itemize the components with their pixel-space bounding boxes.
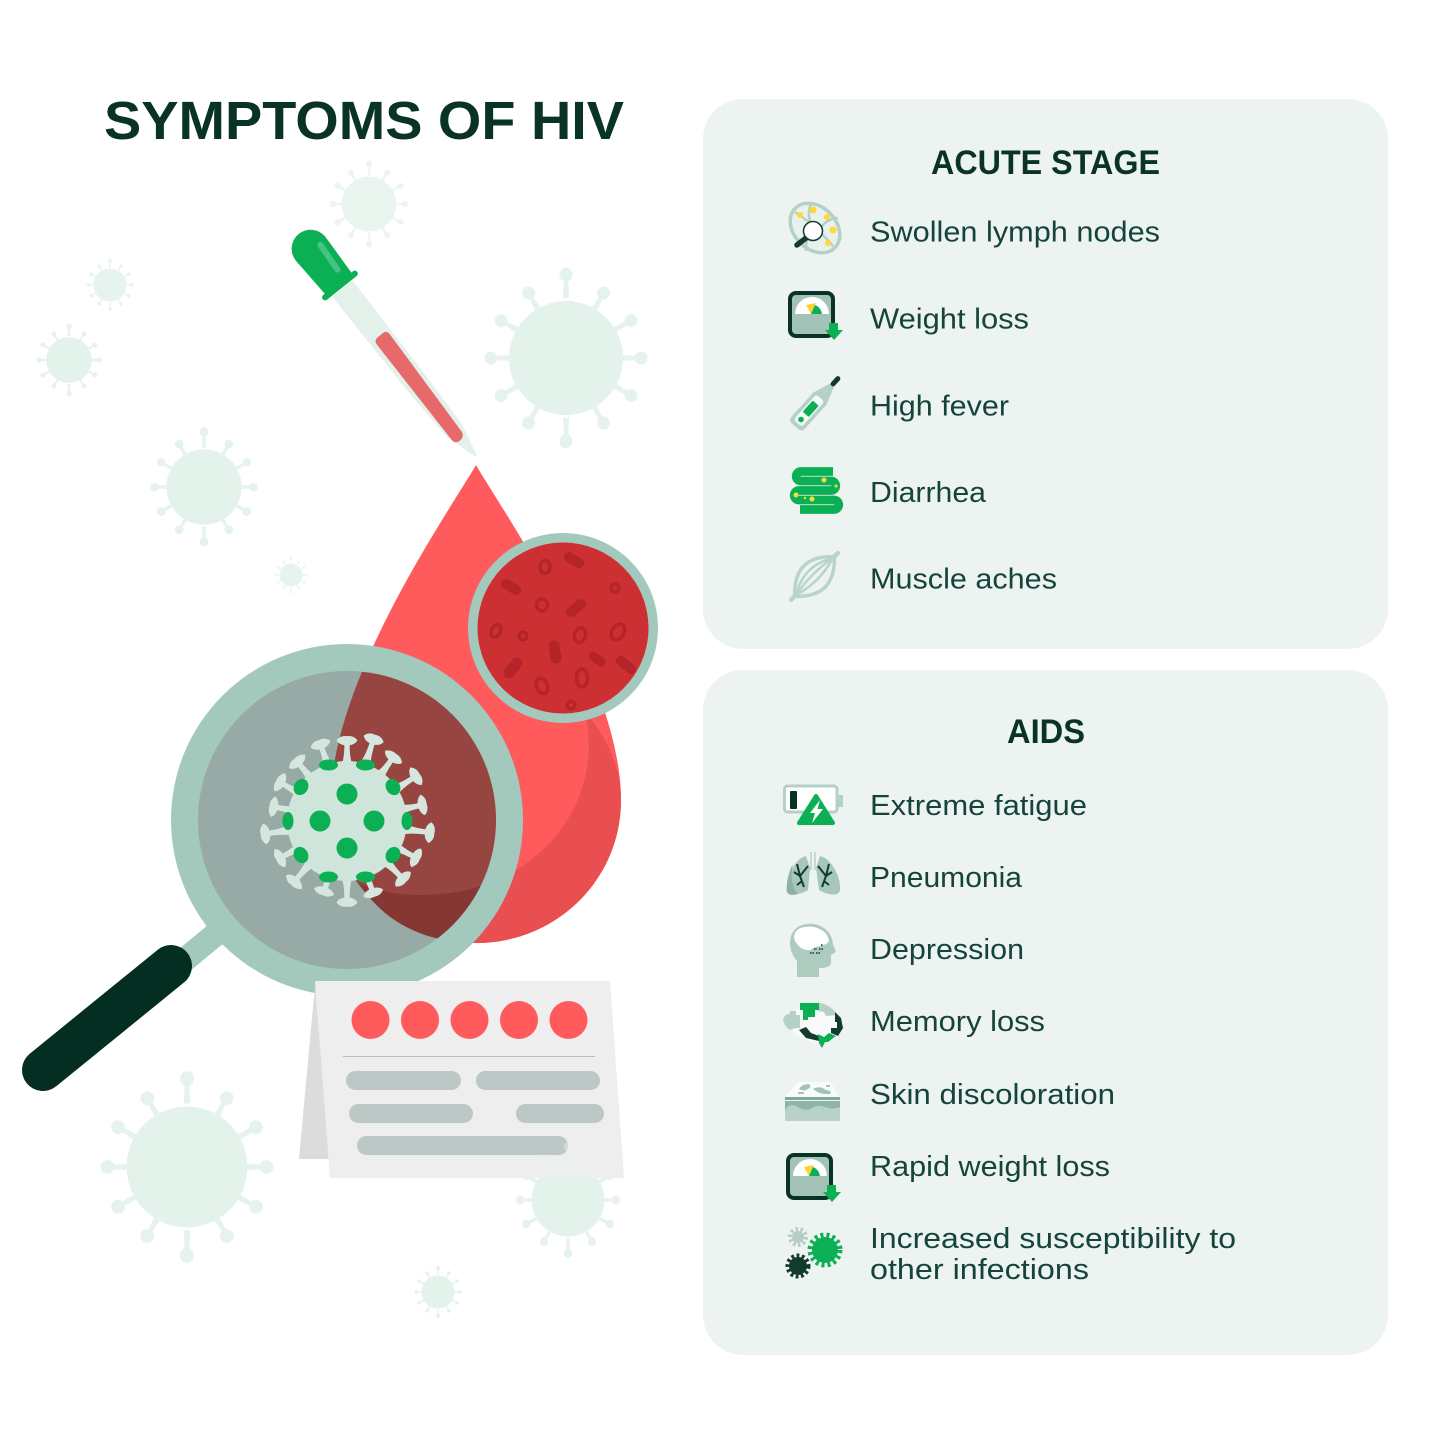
label: swollen lymph nodes: Swollen lymph nodes xyxy=(870,216,1160,248)
icon: thermometer xyxy=(788,373,845,432)
icon: muscle xyxy=(781,543,848,610)
icon: rapid weight scale xyxy=(788,1155,841,1202)
panel: aids xyxy=(703,670,1388,1355)
icon: head depression xyxy=(790,924,836,977)
dropper xyxy=(282,220,493,470)
icon: weight scale xyxy=(790,293,843,340)
title: SYMPTOMS OF HIV xyxy=(104,91,624,151)
icon: lungs xyxy=(787,852,840,895)
label: extreme fatigue: Extreme fatigue xyxy=(870,790,1087,822)
heading: aids: AIDS xyxy=(1007,713,1085,751)
lens xyxy=(171,644,523,994)
handle xyxy=(43,924,228,1070)
label: high fever: High fever xyxy=(870,390,1009,422)
text bars xyxy=(346,1071,604,1155)
blood sample circle xyxy=(468,533,658,723)
icon: low battery xyxy=(784,786,843,823)
label: skin discoloration: Skin discoloration xyxy=(870,1079,1115,1111)
label: increased susceptibility: Increased susceptibility to xyxy=(870,1223,1236,1255)
label: diarrhea: Diarrhea xyxy=(870,477,987,509)
blood drop xyxy=(331,465,621,943)
icon: intestines xyxy=(794,472,839,510)
icon: infections xyxy=(788,1229,840,1276)
label: memory loss: Memory loss xyxy=(870,1006,1045,1038)
heading: acute stage: ACUTE STAGE xyxy=(931,144,1160,182)
result dots xyxy=(352,1001,588,1039)
icon: puzzle brain xyxy=(783,1003,843,1048)
label: depression: Depression xyxy=(870,934,1024,966)
panel: acute stage xyxy=(703,99,1388,649)
icon: skin xyxy=(785,1082,840,1121)
label: rapid weight loss: Rapid weight loss xyxy=(870,1151,1110,1183)
label: other infections: other infections xyxy=(870,1254,1089,1286)
virus under magnification xyxy=(259,731,436,907)
label: weight loss: Weight loss xyxy=(870,304,1029,336)
label: muscle aches: Muscle aches xyxy=(870,564,1057,596)
magnifying glass xyxy=(22,644,523,1091)
background virus particles xyxy=(36,161,647,1318)
test card xyxy=(299,981,624,1178)
icon: swollen lymph nodes xyxy=(780,193,850,263)
label: pneumonia: Pneumonia xyxy=(870,862,1023,894)
